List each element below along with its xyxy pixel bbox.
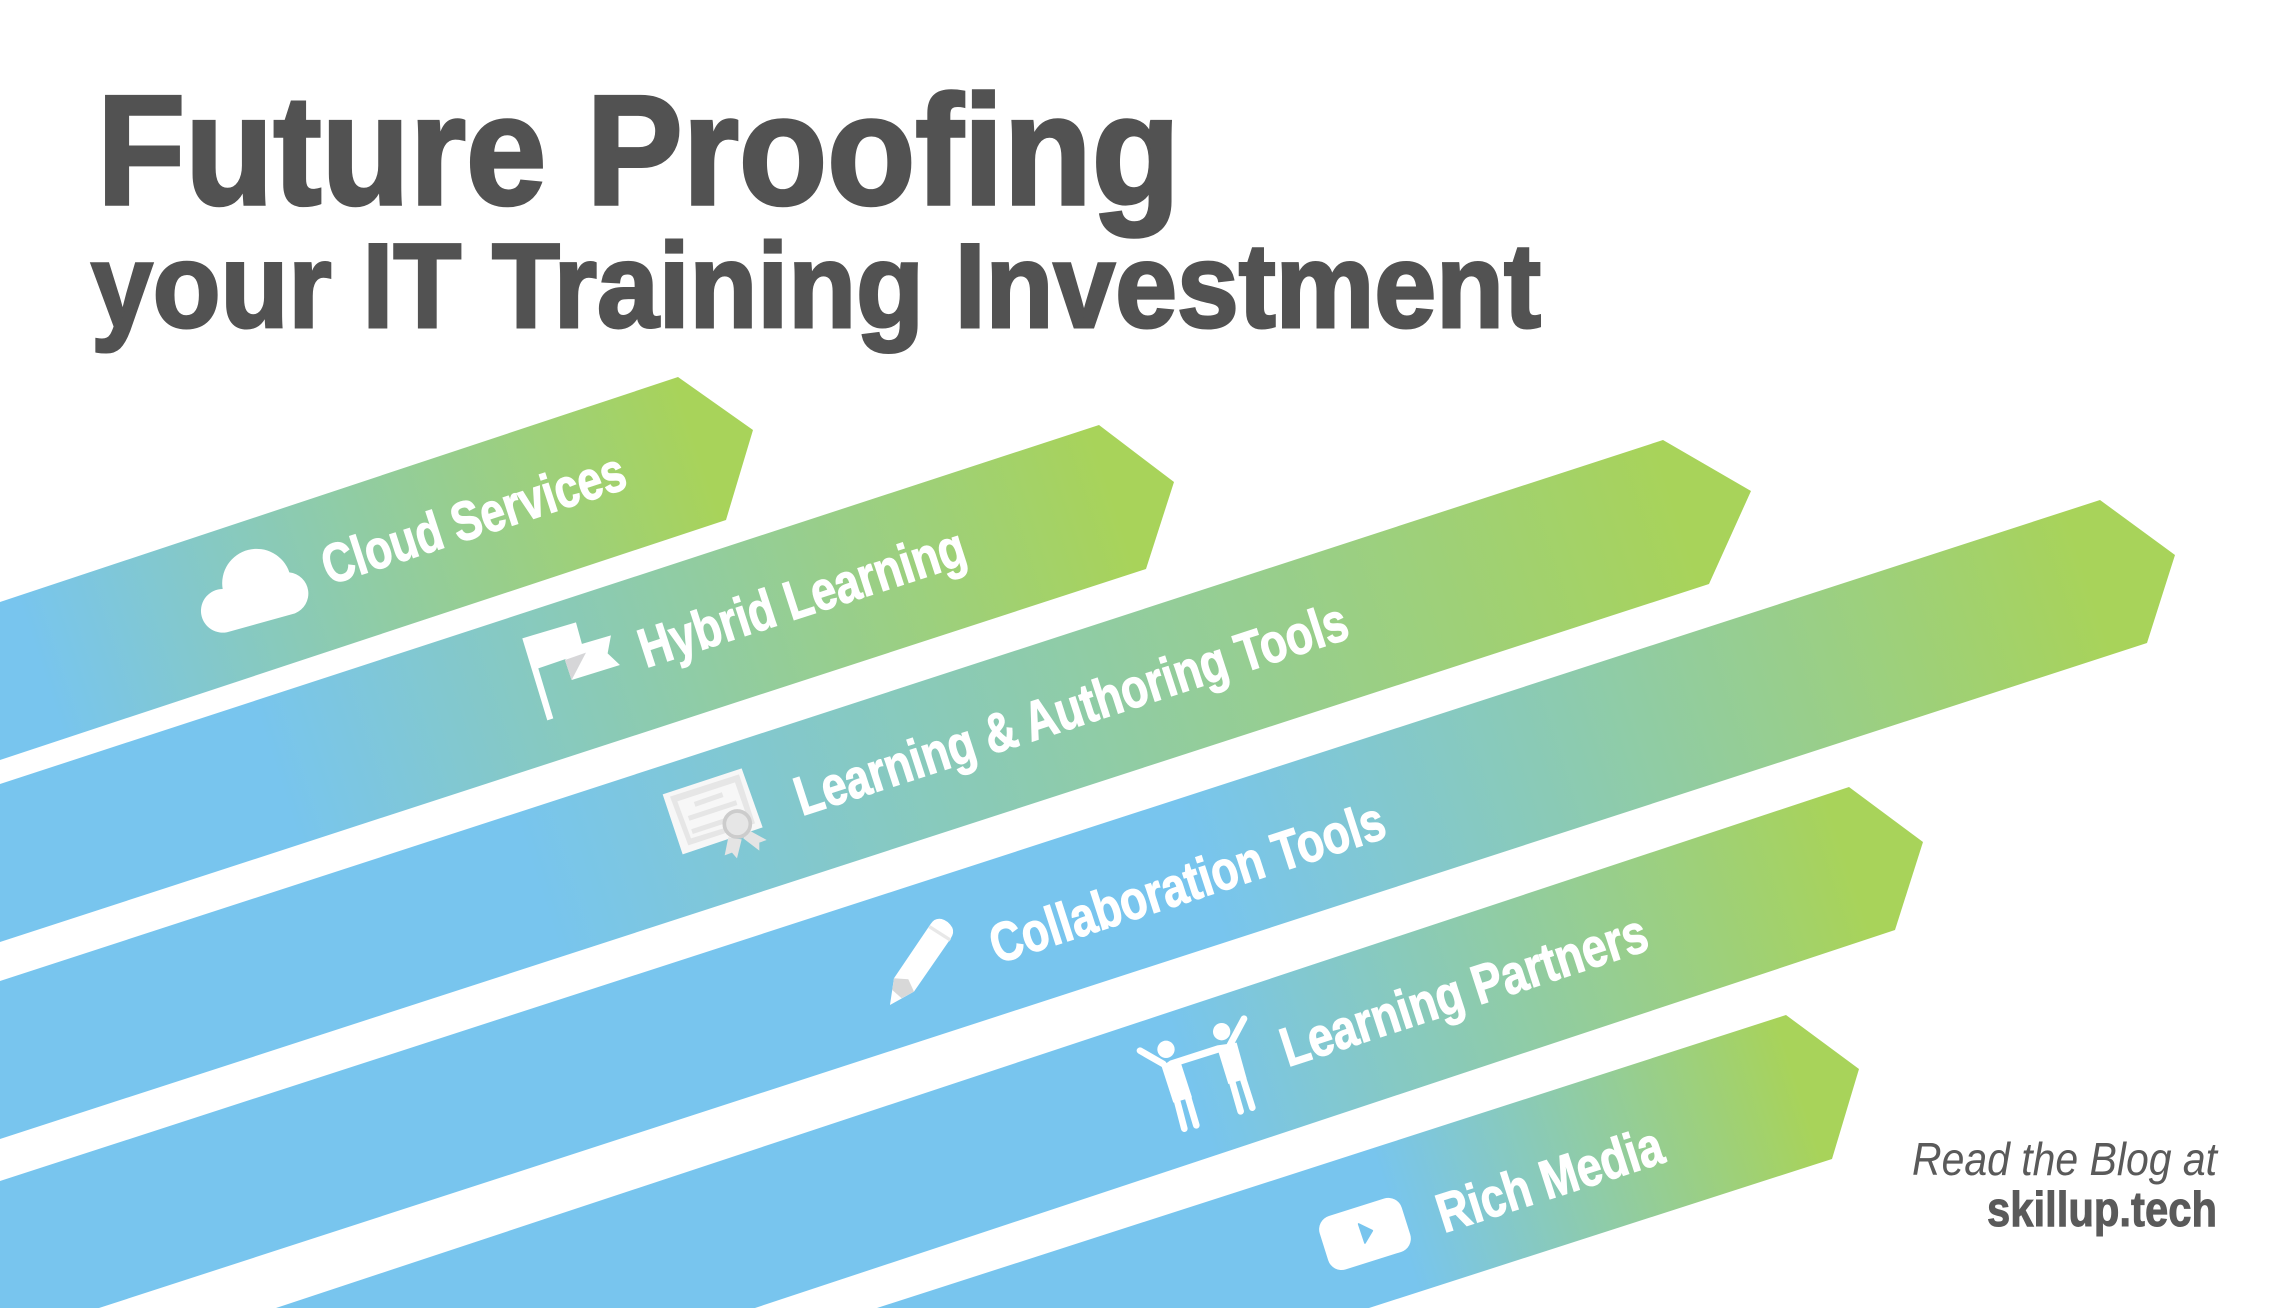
- label: Collaboration Tools: Collaboration Tools: [982, 789, 1393, 975]
- title: [91, 64, 1541, 353]
- label: Cloud Services: Cloud Services: [314, 440, 633, 596]
- ribbon: Rich Media: [0, 1015, 1859, 1308]
- label: Rich Media: Rich Media: [1429, 1114, 1671, 1244]
- ribbon: Learning & Authoring Tools: [0, 440, 1751, 1139]
- icon: flag: [522, 622, 620, 720]
- ribbon: Collaboration Tools: [0, 500, 2175, 1308]
- icon: video play button: [1316, 1194, 1414, 1274]
- label: Hybrid Learning: Hybrid Learning: [631, 515, 973, 679]
- blog call to action: [1912, 1133, 2219, 1237]
- icon: certificate with seal: [663, 768, 767, 858]
- ribbon: Cloud Services: [0, 377, 753, 760]
- ribbon: Hybrid Learning: [0, 425, 1174, 942]
- label: Learning Partners: Learning Partners: [1273, 901, 1655, 1078]
- text: Read the Blog at: Read the Blog at: [1912, 1133, 2219, 1185]
- heading: Future Proofing: Future Proofing: [97, 64, 1180, 238]
- icon: pencil: [890, 919, 953, 1005]
- icon: two people high-fiving: [1140, 1019, 1252, 1129]
- icon: cloud: [201, 549, 308, 633]
- subheading: your IT Training Investment: your IT Training Investment: [91, 219, 1541, 353]
- label: Learning & Authoring Tools: Learning & Authoring Tools: [787, 590, 1355, 827]
- ribbon: Learning Partners: [276, 787, 1923, 1308]
- text: skillup.tech: skillup.tech: [1987, 1183, 2217, 1237]
